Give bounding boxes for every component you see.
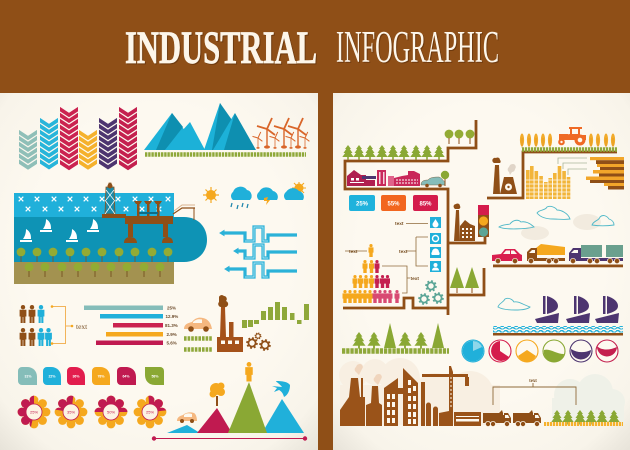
- ground: [14, 262, 174, 284]
- small car: [177, 412, 197, 423]
- gear flowers: 50%: [107, 410, 115, 414]
- snow marks: [19, 197, 170, 211]
- grass strip: [145, 152, 306, 157]
- bracket label: text: [76, 322, 88, 331]
- wheat and tractor: [520, 127, 617, 150]
- gear flowers: [18, 396, 166, 428]
- icon column: [430, 217, 441, 272]
- outlined clouds: [498, 206, 614, 310]
- title: INDUSTRIAL: [125, 22, 317, 74]
- person on peak: [245, 362, 253, 382]
- percentage leaves: 58%: [151, 374, 159, 378]
- sky band: [14, 193, 174, 218]
- percent folders: 85%: [419, 202, 432, 208]
- gear flowers: 35%: [67, 410, 75, 414]
- gauge orange: [516, 340, 538, 362]
- oil rig: [102, 183, 195, 243]
- bracket callout: text: [529, 379, 537, 384]
- text callouts: text: [349, 249, 358, 255]
- pipe diagram: [220, 227, 297, 277]
- bar chart: [84, 306, 178, 346]
- percent folders: 25%: [356, 202, 369, 208]
- water waves: [493, 326, 623, 332]
- percentage leaves: 22%: [48, 374, 56, 378]
- yellow truck: [527, 244, 565, 264]
- city silhouette: [340, 366, 481, 426]
- bird: [272, 381, 290, 397]
- percentage leaves: [18, 367, 164, 385]
- icon: storm cloud: [257, 187, 278, 205]
- percent folders: 55%: [387, 202, 400, 208]
- teal gears: [419, 281, 443, 304]
- percent folders: [349, 195, 438, 211]
- bar chart: 5.6%: [166, 340, 177, 346]
- boats: [20, 219, 99, 242]
- people pyramid: [342, 244, 400, 303]
- shoreline: [493, 333, 623, 336]
- bottom pines and grass: [544, 410, 623, 424]
- orange tree: [210, 382, 225, 406]
- bar chart: 2.9%: [166, 332, 177, 337]
- wind turbines: [252, 118, 309, 149]
- text callouts: text: [410, 276, 419, 282]
- tractor: [558, 127, 586, 146]
- yellow bar chart: [525, 158, 587, 199]
- text callouts: [345, 221, 428, 293]
- red car: [492, 249, 522, 264]
- gauge green: [543, 340, 565, 362]
- sea panel with oil rig: [14, 183, 207, 284]
- green column chart: [242, 302, 309, 328]
- town buildings: [347, 170, 420, 186]
- icon: sun: [203, 187, 219, 203]
- panel: right: [333, 93, 630, 450]
- purple boats: [535, 296, 619, 323]
- dump trucks: [483, 410, 541, 427]
- colored peaks: [167, 382, 304, 433]
- factory: [217, 295, 243, 352]
- text callouts: text: [395, 221, 404, 227]
- bracket callout: [493, 379, 576, 405]
- mountains: [144, 103, 256, 150]
- gear flowers: 25%: [30, 410, 38, 414]
- icon: sun cloud: [284, 182, 306, 200]
- crop rows: [184, 338, 212, 350]
- title: INFOGRAPHIC: [336, 22, 499, 72]
- traffic light: [478, 205, 489, 237]
- water: [14, 217, 207, 262]
- percentage leaves: 36%: [72, 374, 80, 378]
- green car and tree: [421, 171, 449, 187]
- purple truck with trailer: [569, 245, 623, 264]
- forest row: [342, 323, 449, 351]
- chevron columns: [17, 108, 139, 168]
- people groups: [20, 305, 52, 346]
- percentage leaves: 31%: [24, 374, 32, 378]
- road: [493, 264, 623, 267]
- gear flowers: 25%: [146, 410, 154, 414]
- factory with traffic light: [454, 204, 489, 241]
- percentage leaves: 78%: [97, 374, 105, 378]
- gauge circles: [462, 340, 618, 362]
- gauge purple: [570, 340, 592, 362]
- pine row top: [342, 145, 445, 160]
- power plant: [492, 158, 517, 194]
- gauge crimson: [489, 340, 511, 362]
- tree rows: [17, 248, 172, 277]
- vehicles on road: [492, 244, 623, 267]
- weather icons: [203, 182, 306, 209]
- gauge cyan: [462, 340, 484, 362]
- timeline: [152, 436, 307, 441]
- gears: [247, 333, 270, 350]
- icon: rain cloud: [231, 187, 252, 209]
- round trees: [445, 130, 474, 144]
- haze behind city: [339, 358, 500, 425]
- text callouts: text: [399, 249, 408, 255]
- bar chart: 12.9%: [166, 314, 178, 319]
- haze right: [552, 374, 625, 422]
- bar chart: 81.3%: [165, 323, 178, 328]
- road network: [343, 120, 617, 315]
- stacked ledges: [586, 157, 624, 190]
- car icon: [184, 318, 212, 332]
- gauge magenta: [596, 340, 618, 362]
- panel: left: [0, 93, 318, 450]
- triangle trees: [450, 267, 479, 293]
- bar chart: 25%: [167, 306, 176, 310]
- bracket label: [51, 305, 88, 345]
- percentage leaves: 64%: [122, 374, 130, 378]
